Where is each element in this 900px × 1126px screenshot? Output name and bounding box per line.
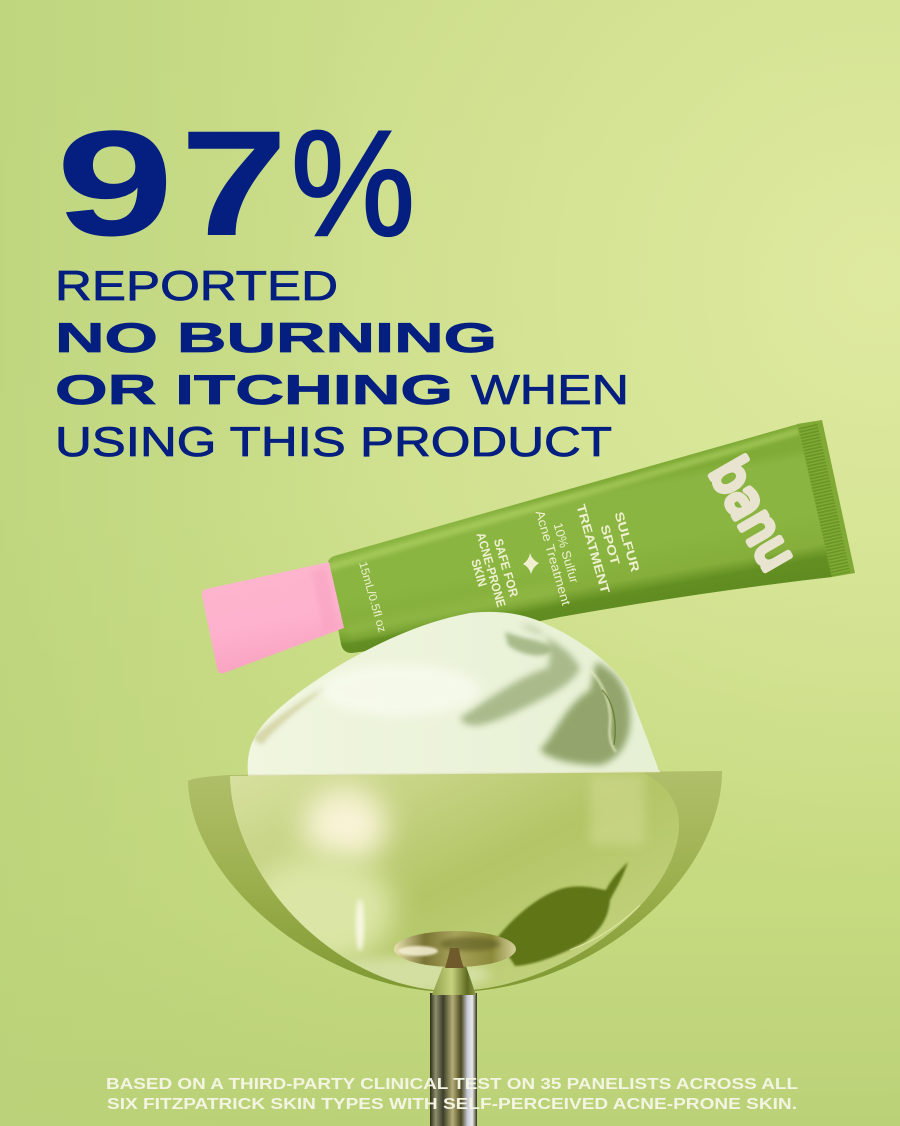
bowl rim [248, 772, 660, 775]
cream body [248, 612, 659, 775]
footnote [106, 1076, 798, 1113]
label: safe for acne-prone skin: SAFE FOR [491, 537, 521, 599]
label: sulfur spot treatment: SPOT [597, 523, 622, 567]
headline line: or itching: OR ITCHING [55, 366, 453, 413]
product tube [202, 420, 855, 674]
label: 10% sulfur acne treatment: 10% Sulfur [551, 521, 581, 585]
pedestal knob [394, 931, 516, 968]
footnote line 1: BASED ON A THIRD-PARTY CLINICAL TEST ON 35 PANELISTS ACROSS ALL [106, 1076, 798, 1093]
label: sulfur spot treatment: SULFUR [612, 510, 642, 574]
label: safe for acne-prone skin [468, 531, 521, 609]
cream shadows [252, 625, 630, 765]
statistic: 97%: % [291, 99, 415, 267]
headline [55, 262, 629, 465]
headline word: when: WHEN [471, 366, 629, 413]
tube label text [356, 503, 642, 634]
label: sulfur spot treatment: TREATMENT [573, 503, 612, 595]
label: 10% sulfur acne treatment: Acne Treatment [533, 509, 573, 607]
headline line: reported: REPORTED [55, 262, 338, 309]
statistic: 97%: 7 [180, 99, 288, 267]
headline line: no burning: NO BURNING [55, 314, 497, 361]
cream dark rim [335, 646, 404, 680]
icon: sparkle [523, 553, 539, 574]
tube cap [202, 562, 344, 674]
footnote line 2: SIX FITZPATRICK SKIN TYPES WITH SELF-PERCEIVED ACNE-PRONE SKIN. [107, 1096, 797, 1113]
crimp ridges [808, 426, 841, 574]
statistic: 97% [56, 99, 415, 267]
bowl highlights and shadow [245, 775, 645, 993]
label: safe for acne-prone skin: SKIN [468, 558, 489, 588]
metal bowl [188, 771, 722, 993]
tube body [328, 424, 832, 653]
label: volume: 15mL/0.5fl oz [356, 560, 388, 634]
label: sulfur spot treatment [573, 503, 642, 595]
pedestal stem [430, 993, 477, 1126]
statistic: 97%: 9 [56, 99, 174, 267]
label: safe for acne-prone skin: ACNE-PRONE [474, 531, 508, 609]
pedestal neck [432, 966, 476, 995]
bowl outer shell [188, 771, 722, 992]
bowl inner reflection [230, 772, 679, 991]
tube crimp [797, 420, 855, 577]
headline line: using this product: USING THIS PRODUCT [55, 418, 612, 465]
brand logo: banu [697, 448, 808, 581]
cream mound [248, 612, 660, 775]
